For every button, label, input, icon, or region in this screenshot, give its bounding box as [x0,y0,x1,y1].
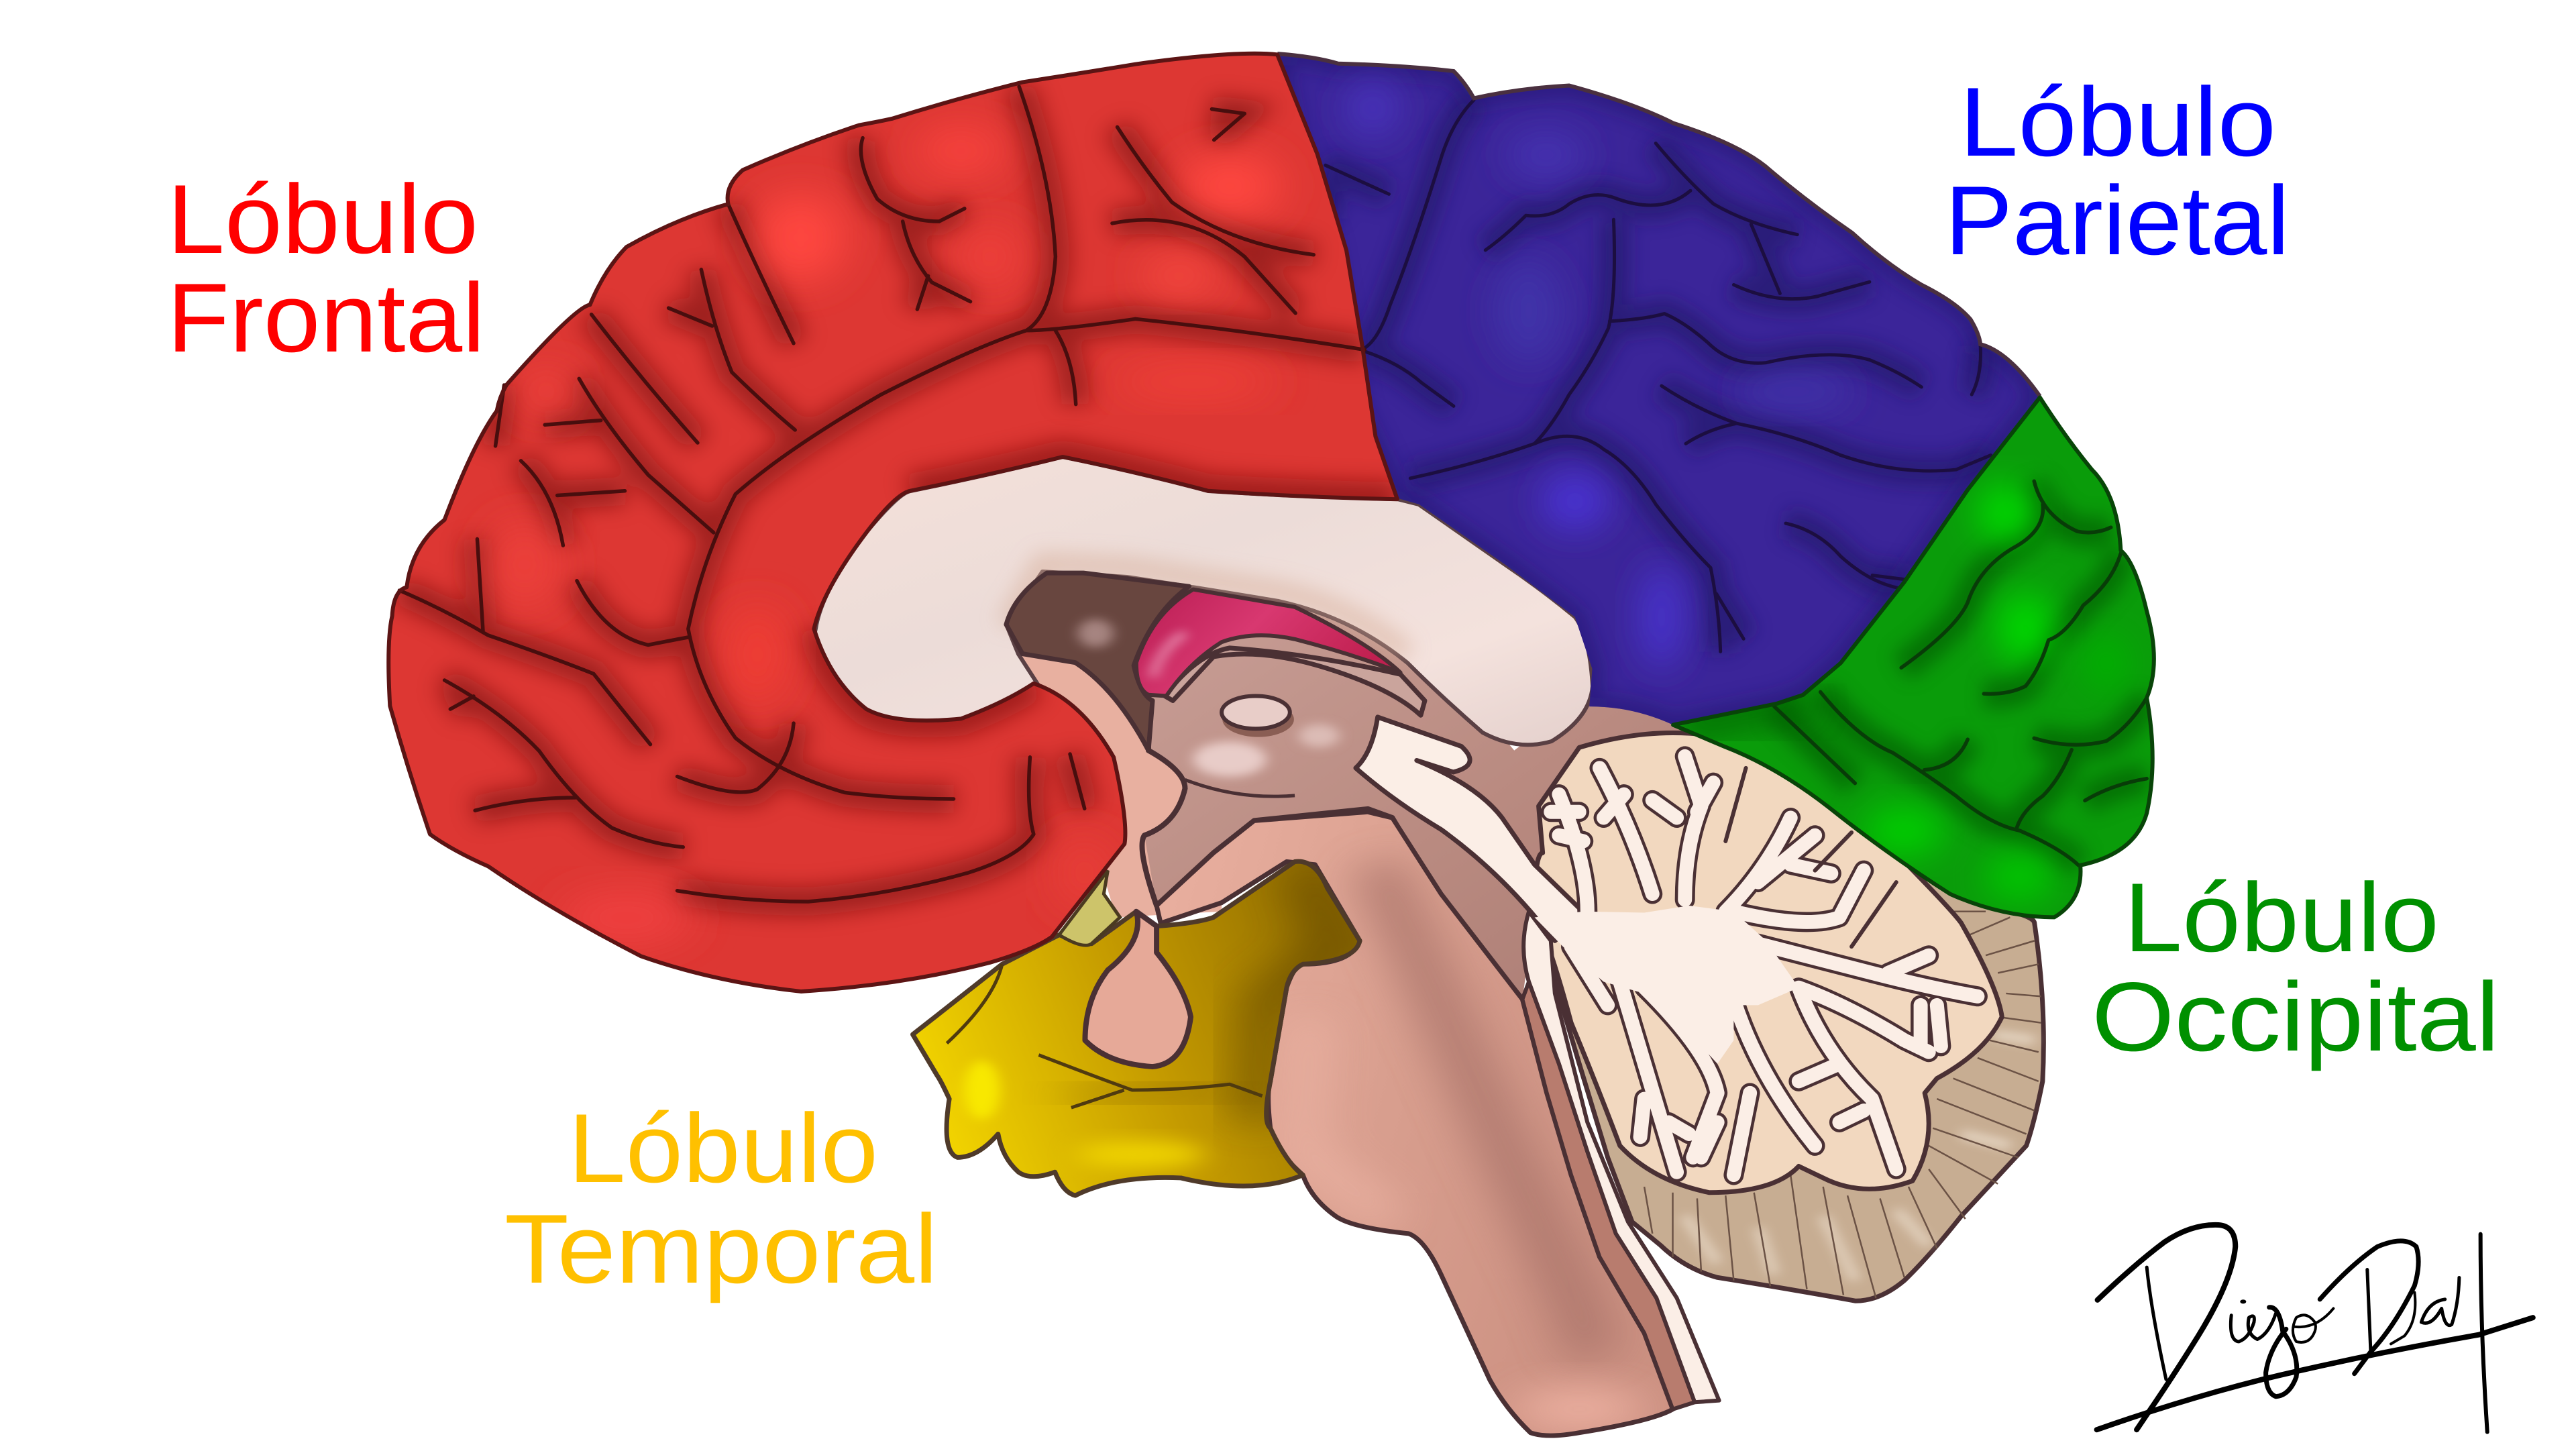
label: Lóbulo Parietal: Parietal [1945,166,2290,275]
label: Lóbulo Temporal: Temporal [504,1194,938,1303]
label: Lóbulo Occipital: Occipital [2092,962,2500,1071]
label: Lóbulo Frontal: Lóbulo [167,164,478,274]
label: Lóbulo Parietal: Lóbulo [1960,67,2276,176]
cerebellar peduncle [1356,717,1586,941]
occipital sulci [1774,481,2147,865]
label: Lóbulo Occipital [2092,863,2500,1071]
corpus callosum [805,457,1593,745]
cerebellum arbor vitae [1356,717,2002,1409]
white matter tract band [1523,912,1719,1402]
brain illustration [388,54,2154,1436]
frontal sulci [399,87,1364,902]
deep structures: ventricle, septum, thalamus [1006,573,1425,751]
label: Lóbulo Parietal [1945,67,2290,275]
cingulate crimson arc [1136,590,1401,696]
lateral ventricle [1006,573,1189,751]
temporal lobe remnant [913,861,1360,1195]
cerebellum inner lobe [1535,733,2002,1193]
signature: Diego Diaz [2097,1225,2533,1432]
brainstem posterior band [1522,981,1695,1409]
cerebellum cortex with folia [1547,856,2043,1301]
brainstem [1157,812,1673,1436]
olive structure [1059,871,1120,945]
pituitary stalk [1085,912,1191,1067]
parietal lobe [1277,54,2040,725]
fornix [1165,648,1425,715]
label: Lóbulo Frontal [167,164,485,372]
label: Lóbulo Temporal: Lóbulo [568,1093,878,1203]
interthalamic oval [1222,696,1294,737]
label: Lóbulo Occipital: Lóbulo [2124,863,2439,972]
label: Lóbulo Frontal: Frontal [167,263,485,372]
frontal lobe [388,54,1397,991]
mid-brain diencephalon tissue [953,572,1782,1000]
label: Lóbulo Temporal [504,1093,938,1303]
occipital lobe [1673,397,2154,917]
parietal sulci [1326,100,1991,651]
arbor core [1535,906,1799,1064]
